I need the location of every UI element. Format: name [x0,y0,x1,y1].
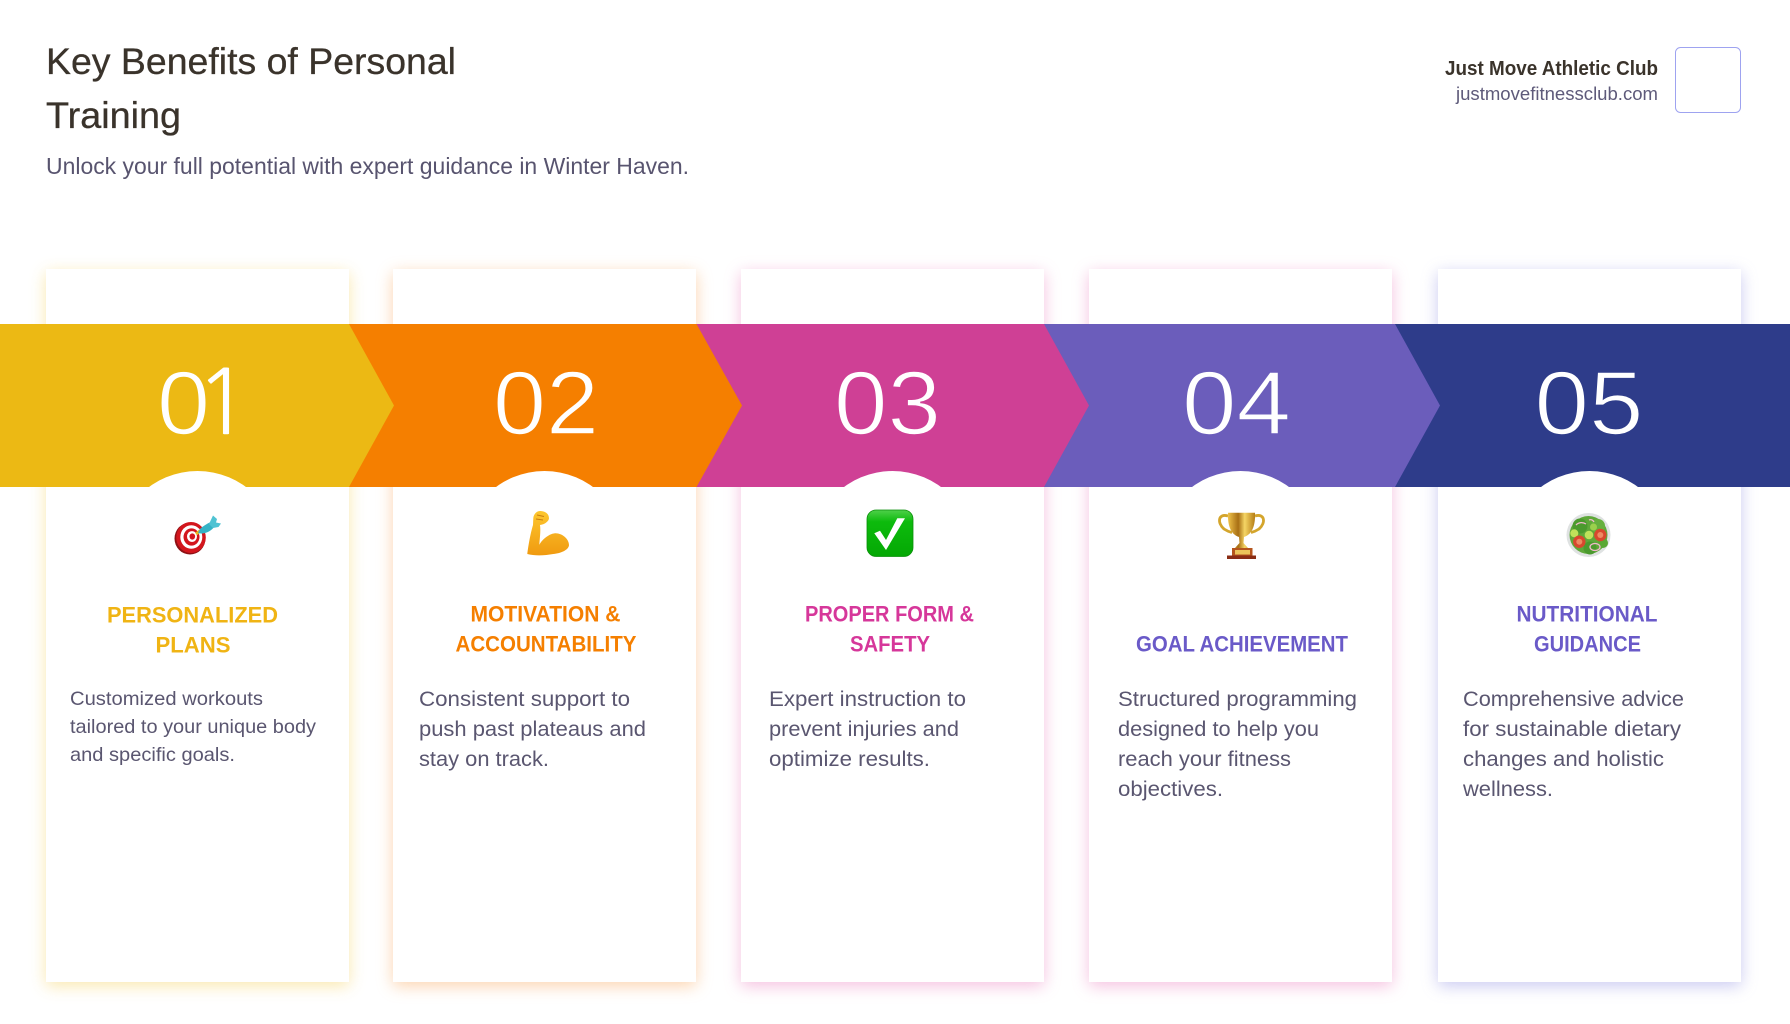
card 2 body text: Consistent support to [419,688,630,711]
card 4 body text: reach your fitness [1118,748,1291,771]
card 5 heading: NUTRITIONAL [1516,602,1658,627]
header title [46,41,456,136]
panel: card 2 background [393,269,696,982]
icon: check mark button [867,510,913,556]
number 04: 04 [1182,354,1291,454]
card 4 heading: GOAL ACHIEVEMENT [1136,632,1349,657]
icon: green salad [1566,513,1610,557]
card 5 body text [1462,688,1684,801]
header subtitle: Unlock your full potential with expert guidance in Winter Haven. [46,153,689,179]
card 5 body text: changes and holistic [1463,748,1664,771]
card 3 heading [805,602,974,657]
card 2 body text [419,688,646,771]
panel: card 1 background [46,269,349,982]
card 1 heading: PLANS [156,632,230,658]
card 2 heading: MOTIVATION & [470,602,621,627]
card 5 body text: Comprehensive advice [1463,688,1684,711]
card 1 body text: and specific goals. [70,744,235,766]
card 3 body text: prevent injuries and [769,718,959,741]
card 3 heading: PROPER FORM & [805,602,974,627]
brand name and website: justmovefitnessclub.com [1455,83,1658,104]
icon notch 5 [1508,471,1672,635]
icon notch 3 [810,471,974,635]
card 1 body text: Customized workouts [70,688,263,710]
icon: trophy [1219,513,1264,559]
card 4 body text: designed to help you [1118,718,1319,741]
card 4 body text: objectives. [1118,778,1223,801]
card 5 body text: wellness. [1462,778,1553,801]
number 01: 0 [157,352,210,453]
panel: card 4 background [1089,269,1392,982]
card 5 heading [1516,602,1658,657]
icon notch 2 [462,471,626,635]
card 2 heading: ACCOUNTABILITY [456,632,637,657]
card 3 body text: optimize results. [769,748,930,771]
panel: card 5 background [1438,269,1741,982]
card 3 body text: Expert instruction to [769,688,966,711]
card 4 body text: Structured programming [1118,688,1357,711]
number 05: 05 [1534,354,1644,454]
header title: Training [46,95,181,136]
number 03: 03 [834,354,941,454]
chevron arrow band [0,324,1790,487]
card 1 body text [70,688,316,766]
number 02: 02 [493,354,599,454]
card 1 heading: PERSONALIZED [107,602,278,628]
panel: card 3 background [741,269,1044,982]
logo placeholder box [1676,48,1740,112]
icon: target with dart [174,516,221,554]
card 2 heading [456,602,637,657]
brand name and website [1445,57,1658,104]
number 01: 1 [194,358,252,448]
icon: flexed biceps [527,511,569,555]
header title: Key Benefits of Personal [46,41,456,82]
brand name and website: Just Move Athletic Club [1445,57,1658,80]
card 1 body text: tailored to your unique body [70,716,316,738]
card 2 body text: push past plateaus and [419,718,646,741]
card 1 heading [107,602,278,658]
icon notch 1 [116,471,280,635]
icon notch 4 [1158,471,1322,635]
card 3 heading: SAFETY [850,632,930,657]
card 2 body text: stay on track. [419,748,549,771]
card 5 heading: GUIDANCE [1534,632,1641,657]
card 3 body text [769,688,966,771]
card 4 body text [1118,688,1357,801]
card 5 body text: for sustainable dietary [1463,718,1682,741]
